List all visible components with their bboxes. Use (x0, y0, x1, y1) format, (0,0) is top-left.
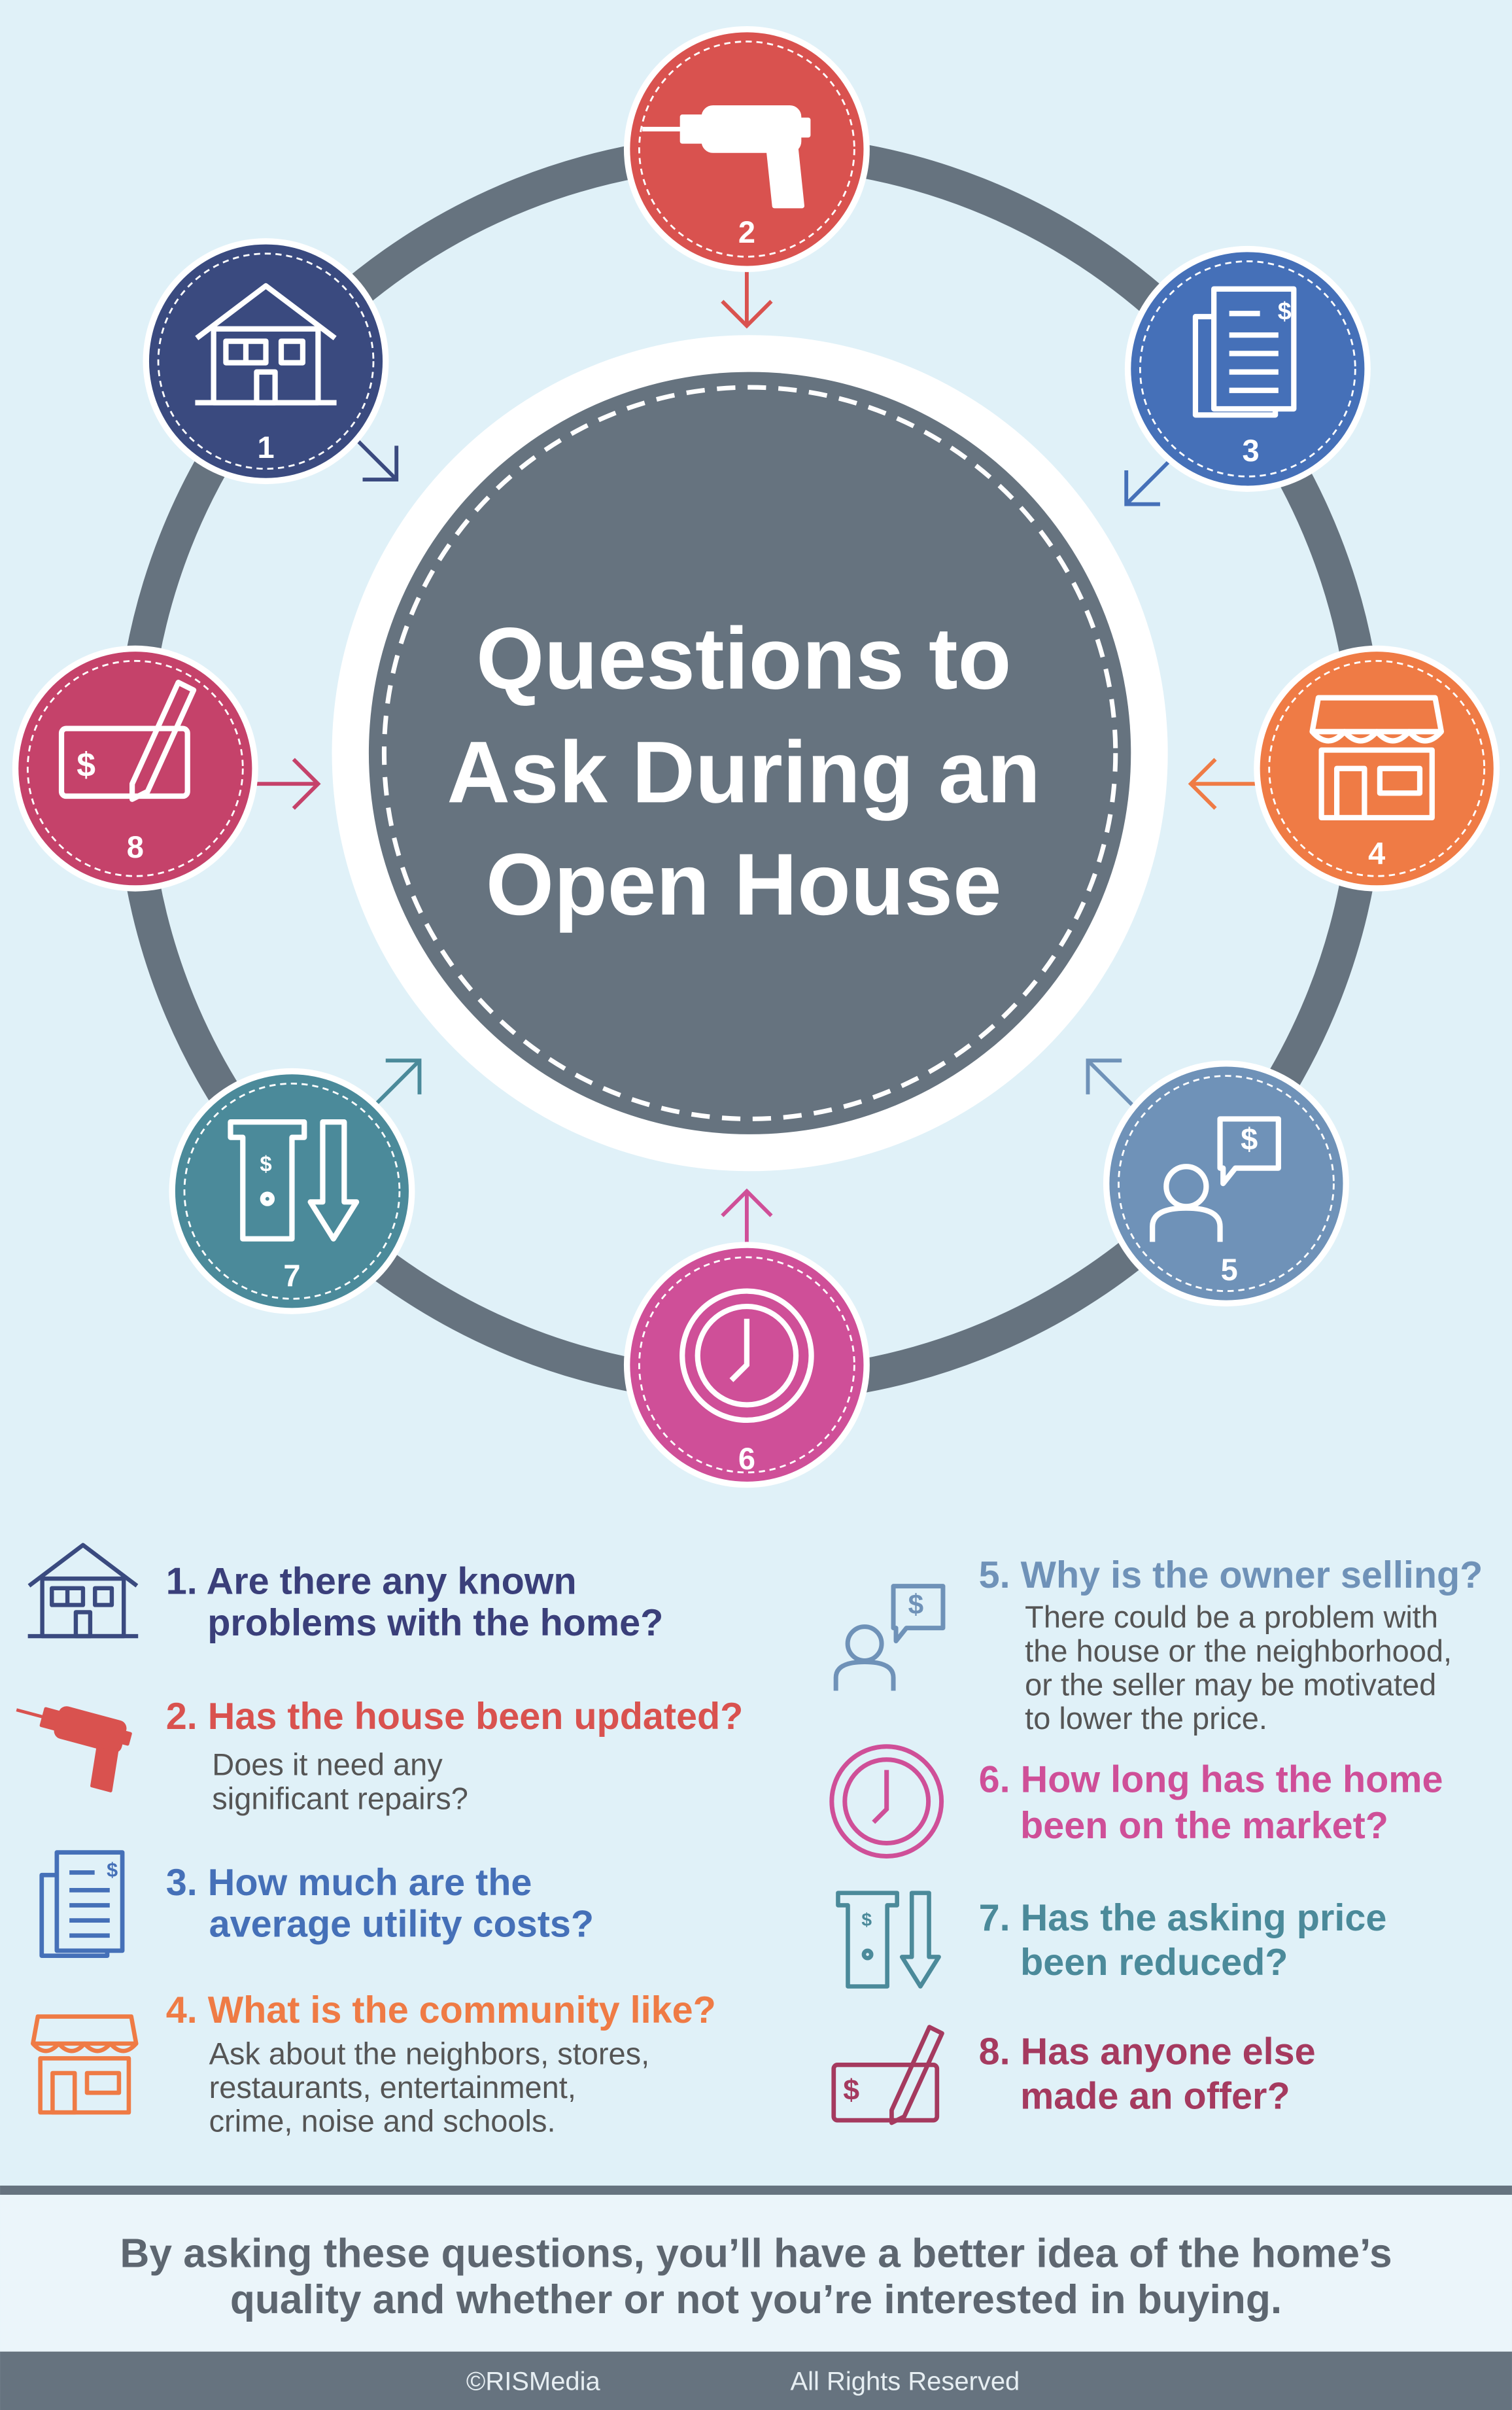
circle 7: $ (260, 1151, 272, 1176)
list item 4 (33, 1989, 716, 2139)
title: Open House (486, 836, 1002, 934)
footer (0, 2352, 1512, 2410)
list item 3: $ (107, 1859, 118, 1881)
list item 5: 5. Why is the owner selling? (979, 1554, 1483, 1596)
circle 6: 6 (738, 1441, 755, 1476)
list item 5 (836, 1554, 1483, 1736)
circle 6 (624, 1242, 870, 1488)
circle 1: 1 (257, 430, 275, 464)
list item 8 (834, 2027, 1316, 2123)
list item 5: to lower the price. (1025, 1701, 1267, 1736)
circle 5: $ (1241, 1121, 1258, 1156)
list item 7 (838, 1893, 1386, 1986)
list item 4: Ask about the neighbors, stores, (209, 2036, 649, 2070)
list item 3: 3. How much are the (166, 1862, 532, 1904)
list item 1: problems with the home? (207, 1602, 663, 1644)
list item 2 (3, 1695, 743, 1815)
circle 2 (624, 26, 870, 272)
list item 7: $ (861, 1909, 872, 1930)
list item 7: 7. Has the asking price (979, 1897, 1386, 1939)
arrows (254, 269, 1263, 1253)
list item 4: crime, noise and schools. (209, 2104, 556, 2139)
footer: ©RISMedia (466, 2367, 600, 2396)
summary panel: By asking these questions, you’ll have a better idea of the home’s (120, 2231, 1392, 2276)
list item 6: 6. How long has the home (979, 1759, 1443, 1801)
title: Ask During an (447, 724, 1040, 821)
title: Questions to (476, 610, 1011, 708)
list item 4: 4. What is the community like? (166, 1989, 716, 2031)
footer: All Rights Reserved (791, 2367, 1020, 2396)
list item 2: significant repairs? (212, 1781, 468, 1815)
circle 1 (143, 238, 388, 484)
circle 7: 7 (283, 1259, 301, 1293)
summary panel: quality and whether or not you’re interested in buying. (230, 2277, 1282, 2322)
list item 5: There could be a problem with (1025, 1599, 1438, 1634)
list item 8: $ (843, 2074, 859, 2106)
list item 8: 8. Has anyone else (979, 2031, 1316, 2072)
list item 3: average utility costs? (209, 1903, 594, 1945)
list item 5: or the seller may be motivated (1025, 1667, 1436, 1702)
list item 2: 2. Has the house been updated? (166, 1696, 743, 1738)
circle 2: 2 (738, 215, 755, 249)
circle 8: 8 (127, 830, 144, 864)
list item 1 (28, 1545, 663, 1644)
circle 5 (1103, 1060, 1349, 1306)
circle 7 (169, 1068, 415, 1314)
list item 3 (42, 1853, 594, 1956)
circle 4: 4 (1368, 835, 1385, 870)
circle 3: 3 (1242, 433, 1260, 468)
list item 6 (832, 1747, 1443, 1856)
list item 2: Does it need any (212, 1747, 443, 1782)
list item 5: $ (908, 1589, 923, 1620)
circle 8 (12, 646, 258, 892)
list item 5: the house or the neighborhood, (1025, 1633, 1452, 1668)
list item 4: restaurants, entertainment, (209, 2070, 576, 2104)
list item 8: made an offer? (1020, 2075, 1290, 2117)
list item 7: been reduced? (1020, 1942, 1288, 1983)
circle 3 (1125, 246, 1371, 492)
circle 4 (1254, 646, 1500, 892)
circle 5: 5 (1221, 1252, 1238, 1287)
list item 1: 1. Are there any known (166, 1560, 577, 1602)
summary panel (0, 2186, 1512, 2352)
circle 3: $ (1278, 298, 1292, 325)
circle 8: $ (77, 745, 95, 783)
ring (132, 150, 1367, 1386)
list item 6: been on the market? (1020, 1805, 1388, 1847)
center title circle (332, 335, 1168, 1171)
